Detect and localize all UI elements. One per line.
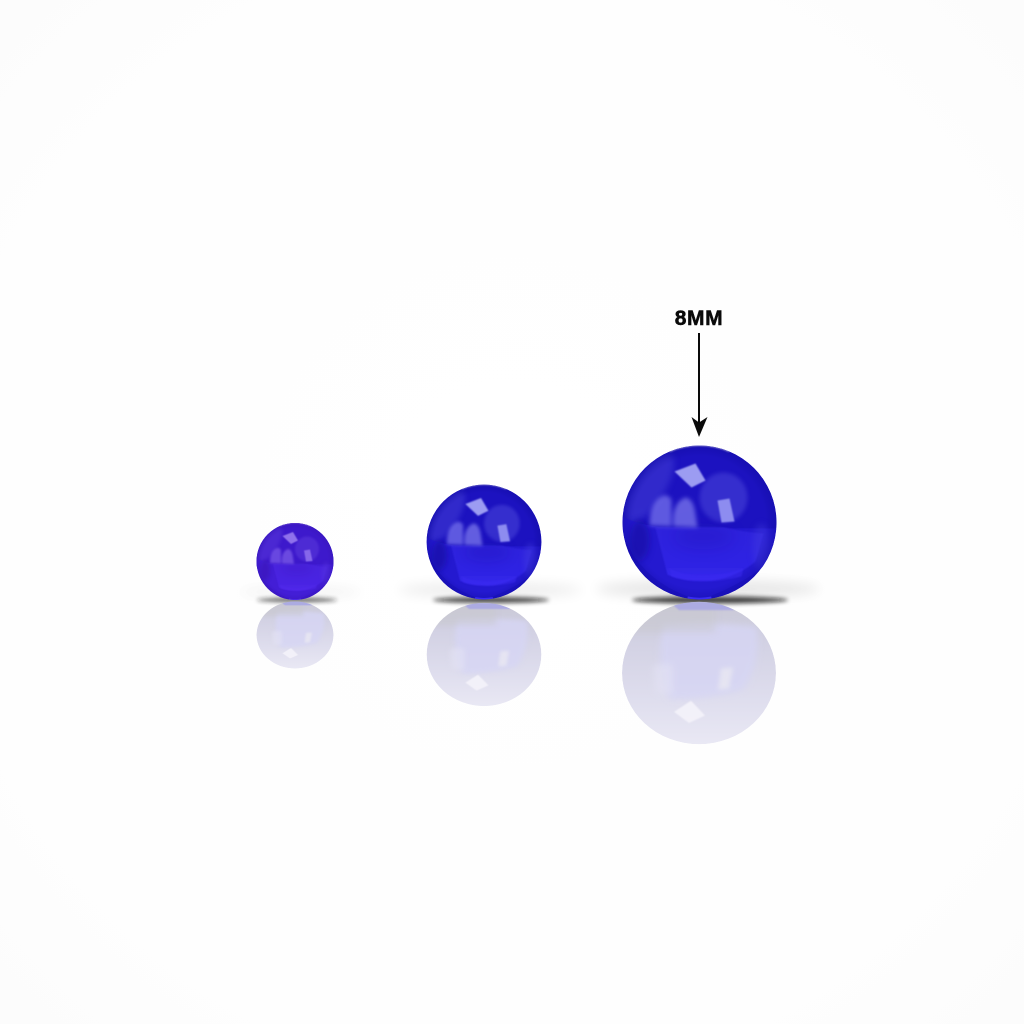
size label: 8MM: [675, 307, 723, 330]
medium sphere: [421, 482, 544, 600]
large sphere shadow: [632, 596, 788, 604]
arrow pointing to large sphere: [692, 333, 708, 437]
small sphere group (left): [253, 522, 337, 668]
medium sphere shadow: [433, 597, 549, 603]
medium sphere reflection: [427, 603, 541, 706]
large sphere group (right): [616, 442, 788, 744]
large sphere reflection: [622, 602, 776, 744]
small sphere shadow: [257, 598, 337, 602]
large sphere: [616, 442, 780, 600]
medium sphere group (centre): [421, 482, 549, 706]
floor shading band: [238, 580, 820, 598]
small sphere: [253, 522, 335, 600]
small sphere reflection: [256, 602, 334, 668]
